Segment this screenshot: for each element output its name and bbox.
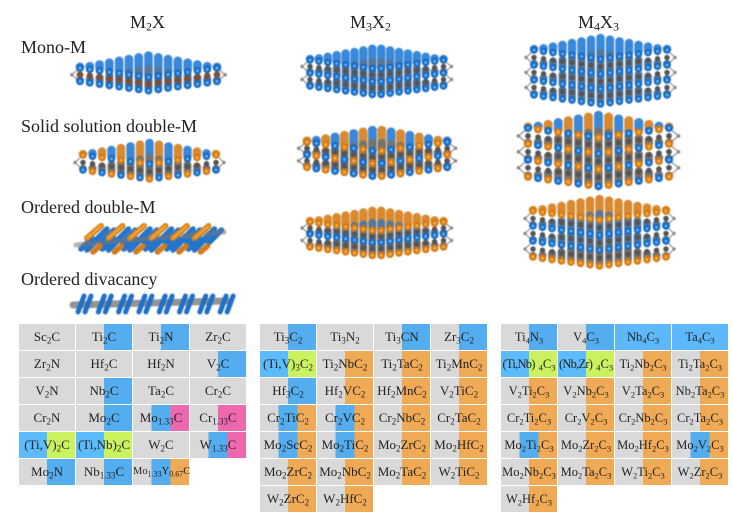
panel: M4X3 composition table: V2Ti2C3 xyxy=(509,384,549,400)
panel: M4X3 composition table: V2Nb2C3 xyxy=(563,384,609,400)
panel: M3X2 composition table: Zr3C2 xyxy=(444,329,474,346)
atomic structure illustrations xyxy=(69,33,681,316)
panel: M3X2 composition table: Mo2ScC2 xyxy=(264,437,312,454)
panel: M4X3 composition table: W2Hf2C3 xyxy=(506,492,552,508)
structure: M2X solid solution double-M xyxy=(75,143,224,179)
panel: M3X2 composition table: Cr2TiC2 xyxy=(267,410,309,426)
panel: M4X3 composition table: Ta4C3 xyxy=(685,330,715,346)
panel: M2X composition table: Hf2C xyxy=(91,356,117,372)
panel: M4X3 composition table xyxy=(501,324,728,512)
panel: M4X3 composition table: Cr2V2C3 xyxy=(565,411,607,426)
panel: M3X2 composition table: W2TiC2 xyxy=(438,464,480,480)
panel: M2X composition table: Ti2N xyxy=(148,329,174,346)
panel: M2X composition table: Zr2C xyxy=(205,329,231,346)
panel: M3X2 composition table xyxy=(260,324,487,512)
panel: M3X2 composition table: Hf3C2 xyxy=(272,383,304,400)
structure: M3X2 solid solution double-M xyxy=(299,130,456,176)
panel: M2X composition table: Cr1.33C xyxy=(199,410,237,426)
panel: M2X composition table: W1.33C xyxy=(200,437,236,454)
panel: M2X composition table: Ti2C xyxy=(92,329,116,346)
panel: M3X2 composition table: Mo2ZrC2 xyxy=(378,437,426,454)
panel: M3X2 composition table: W2ZrC2 xyxy=(267,491,309,508)
panel: M2X composition table: Mo1.33C xyxy=(140,410,182,426)
structure: M4X3 ordered double-M xyxy=(525,199,674,266)
row label: Ordered double-M: Ordered double-M xyxy=(21,197,155,217)
panel: M4X3 composition table: Mo2Ti2C3 xyxy=(504,438,554,454)
panel: M4X3 composition table: Ti4N3 xyxy=(515,330,543,346)
structure: M4X3 solid solution double-M xyxy=(518,115,679,186)
panel: M3X2 composition table: Ti2MnC2 xyxy=(436,356,482,372)
panel: M2X composition table: Zr2N xyxy=(34,356,60,372)
panel: M4X3 composition table: V4C3 xyxy=(573,330,599,346)
panel: M4X3 composition table: Nb2Ta2C3 xyxy=(676,384,724,400)
panel: M3X2 composition table: Mo2TiC2 xyxy=(322,437,368,454)
panel: M4X3 composition table: (Nb,Zr) 4C3 xyxy=(559,357,613,372)
panel: M3X2 composition table: Cr2VC2 xyxy=(325,410,365,426)
column heading: M2X: M2X xyxy=(130,12,165,34)
panel: M4X3 composition table: Mo2Zr2C3 xyxy=(561,438,611,454)
panel: M4X3 composition table: Mo2Hf2C3 xyxy=(617,438,669,454)
panel: M3X2 composition table: W2HfC2 xyxy=(323,491,367,508)
panel: M4X3 composition table: Mo2Nb2C3 xyxy=(502,465,556,480)
panel: M3X2 composition table: Mo2ZrC2 xyxy=(264,464,312,480)
panel: M3X2 composition table: Cr2NbC2 xyxy=(379,410,425,426)
panel: M2X composition table: Nb2C xyxy=(89,383,119,400)
panel: M4X3 composition table: Cr2Ta2C3 xyxy=(677,411,723,426)
structure: M2X ordered double-M xyxy=(76,226,224,252)
panel: M2X composition table: Hf2N xyxy=(147,356,175,372)
panel: M4X3 composition table: Cr2Nb2C3 xyxy=(619,411,667,426)
structure: M2X ordered divacancy xyxy=(73,296,233,312)
column heading: M4X3: M4X3 xyxy=(578,12,619,34)
panel: M2X composition table: Mo1.33Y0.67C xyxy=(133,466,190,478)
panel: M2X composition table: (Ti,Nb)2C xyxy=(78,437,130,454)
panel: M3X2 composition table: Hf2VC2 xyxy=(325,383,365,400)
panel: M4X3 composition table: W2Ti2C3 xyxy=(621,465,665,480)
panel: M2X composition table: V2N xyxy=(35,383,59,400)
structure: M3X2 ordered double-M xyxy=(302,211,452,255)
panel: M4X3 composition table: Mo2V2C3 xyxy=(676,438,724,454)
panel: M3X2 composition table: Mo2NbC2 xyxy=(319,464,371,480)
panel: M2X composition table: Cr2C xyxy=(205,383,231,400)
panel: M4X3 composition table: Ti2Nb2C3 xyxy=(619,357,667,372)
structure: M3X2 mono-M xyxy=(302,49,452,94)
panel: M3X2 composition table: Ti2TaC2 xyxy=(381,356,423,372)
panel: M3X2 composition table: Ti2NbC2 xyxy=(323,356,367,372)
panel: M2X composition table: W2C xyxy=(148,437,174,454)
row label: Solid solution double-M: Solid solution double-M xyxy=(21,116,197,136)
panel: M3X2 composition table: (Ti,V)3C2 xyxy=(263,356,313,372)
panel: M2X composition table xyxy=(19,324,246,485)
panel: M4X3 composition table: V2Ta2C3 xyxy=(622,384,664,400)
panel: M4X3 composition table: (Ti,Nb) 4C3 xyxy=(502,357,556,372)
panel: M2X composition table: Mo2N xyxy=(31,464,63,480)
panel: M3X2 composition table: Ti3C2 xyxy=(274,329,302,346)
panel: M3X2 composition table: Mo2HfC2 xyxy=(434,437,484,454)
panel: M4X3 composition table: Ti2Ta2C3 xyxy=(678,357,722,372)
structure: M4X3 mono-M xyxy=(526,38,675,104)
panel: M4X3 composition table: Cr2Ti2C3 xyxy=(507,411,551,426)
panel: M2X composition table: Nb1.33C xyxy=(84,464,124,480)
panel: M3X2 composition table: Ti3CN xyxy=(385,329,419,346)
panel: M2X composition table: V2C xyxy=(207,356,229,372)
panel: M2X composition table: Mo2C xyxy=(88,410,120,426)
panel: M3X2 composition table: Ti3N2 xyxy=(330,329,360,346)
row label: Mono-M: Mono-M xyxy=(21,37,86,57)
panel: M3X2 composition table: Cr2TaC2 xyxy=(437,410,481,426)
panel: M4X3 composition table: Nb4C3 xyxy=(627,330,659,346)
panel: M4X3 composition table: W2Zr2C3 xyxy=(678,465,722,480)
panel: M3X2 composition table: V2TiC2 xyxy=(440,383,478,400)
column heading: M3X2: M3X2 xyxy=(350,12,391,34)
panel: M2X composition table: Sc2C xyxy=(34,329,60,346)
panel: M4X3 composition table: Mo2Ta2C3 xyxy=(561,465,611,480)
panel: M3X2 composition table: Mo2TaC2 xyxy=(378,464,426,480)
panel: M2X composition table: Ta2C xyxy=(148,383,174,400)
panel: M3X2 composition table: Hf2MnC2 xyxy=(377,383,427,400)
row label: Ordered divacancy: Ordered divacancy xyxy=(21,269,157,289)
panel: M2X composition table: (Ti,V)2C xyxy=(24,437,70,454)
structure: M2X mono-M xyxy=(72,56,225,91)
panel: M2X composition table: Cr2N xyxy=(34,410,60,426)
